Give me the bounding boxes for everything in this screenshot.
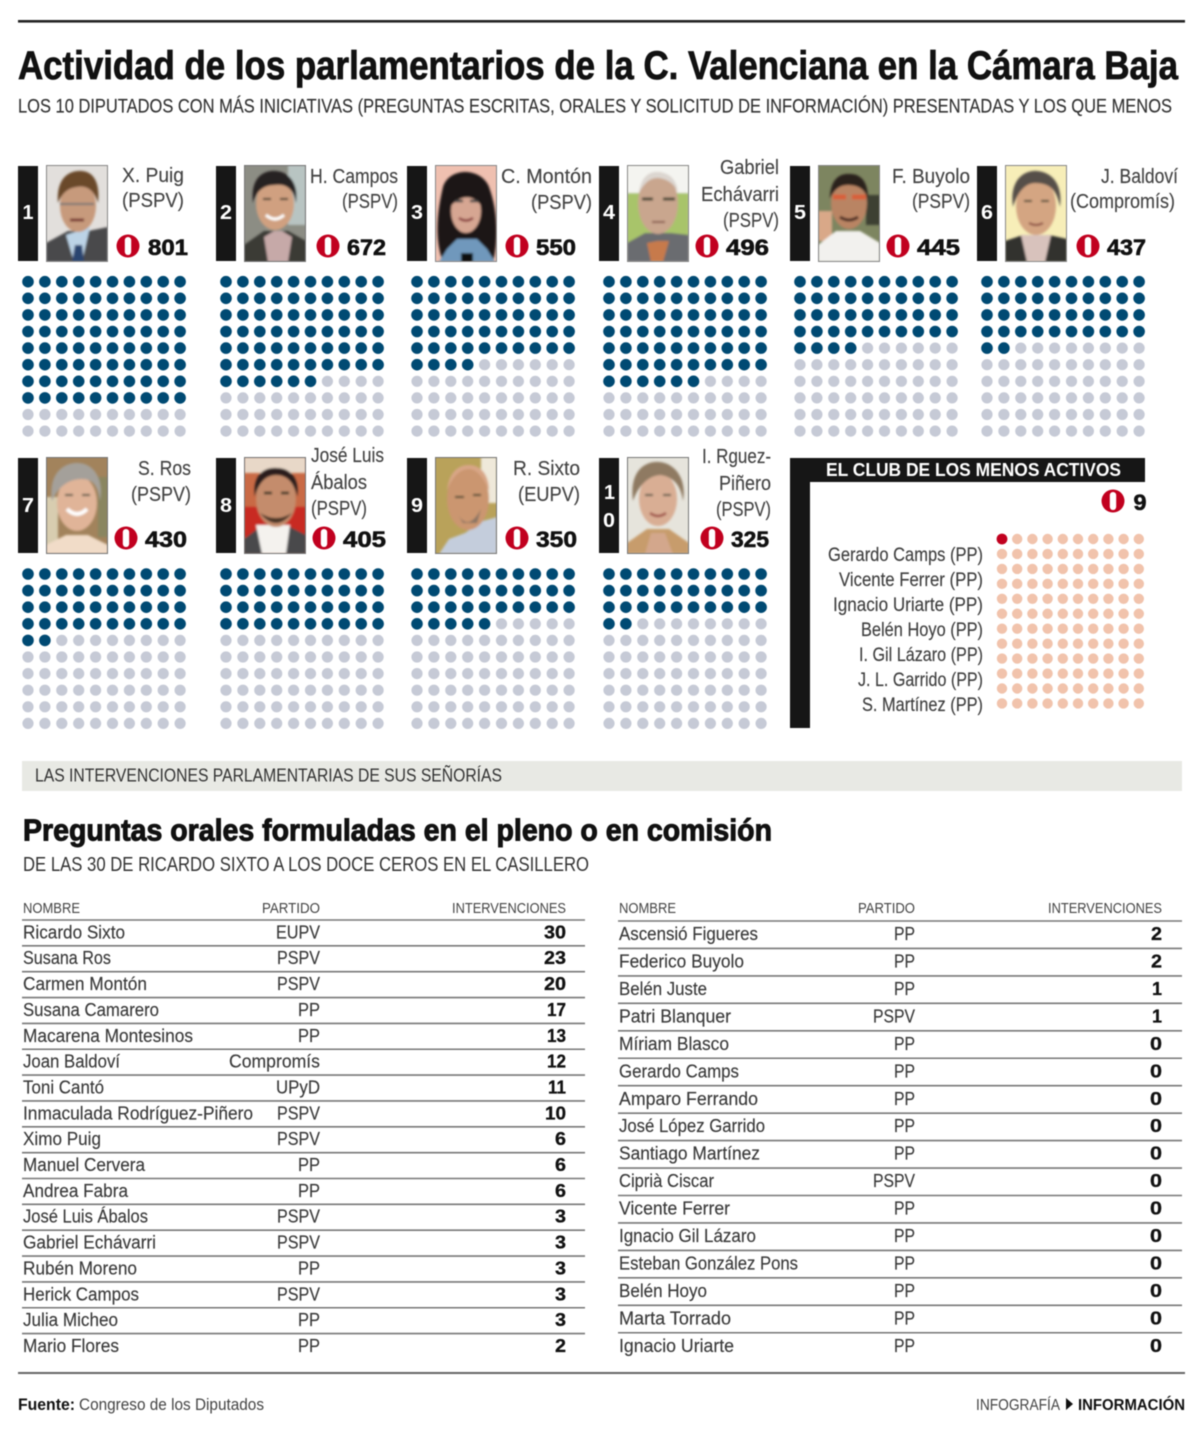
credit: INFORMACIÓN <box>1078 1395 1185 1414</box>
row: Amparo Ferrando: Amparo Ferrando <box>619 1088 758 1109</box>
row: Ciprià Ciscar: PSPV <box>873 1170 916 1191</box>
credit <box>976 1395 1185 1414</box>
value: 801 <box>148 235 188 260</box>
table header: PARTIDO <box>858 901 915 917</box>
photo: I. Rguez-Piñero <box>627 457 689 554</box>
table header <box>619 901 1162 917</box>
names list: Ignacio Uriarte (PP) <box>833 594 983 616</box>
rank 10 <box>599 458 619 553</box>
photo: S. Ros <box>46 457 108 554</box>
row: Ricardo Sixto <box>23 921 566 942</box>
section band <box>22 761 1182 791</box>
row: Amparo Ferrando <box>619 1088 1162 1109</box>
row: Mario Flores: 2 <box>555 1335 566 1356</box>
row: Carmen Montón: 20 <box>544 973 566 994</box>
row: José López Garrido: José López Garrido <box>619 1115 765 1136</box>
rank 7 <box>18 458 38 553</box>
name <box>310 166 398 213</box>
name: (PSPV) <box>342 191 398 213</box>
row: Ignacio Gil Lázaro <box>619 1225 1162 1246</box>
row: Vicente Ferrer: Vicente Ferrer <box>619 1198 730 1219</box>
value: 430 <box>145 527 187 552</box>
dot grid <box>28 574 180 723</box>
row: Ignacio Uriarte <box>619 1335 1162 1356</box>
row: Carmen Montón: PSPV <box>277 973 321 994</box>
value: 445 <box>917 235 960 260</box>
frame and heading: EL CLUB DE LOS MENOS ACTIVOS <box>826 460 1121 480</box>
row: Marta Torrado: 0 <box>1150 1307 1162 1328</box>
icon: initiatives badge <box>1076 234 1100 258</box>
icon: initiatives badge <box>700 526 724 550</box>
name: Gabriel <box>720 157 779 179</box>
row: Belén Juste: 1 <box>1152 978 1162 999</box>
row: Susana Camarero: Susana Camarero <box>23 999 159 1020</box>
subheading: DE LAS 30 DE RICARDO SIXTO A LOS DOCE CEROS EN EL CASILLERO <box>23 853 589 876</box>
name: H. Campos <box>310 166 398 188</box>
row: Andrea Fabra: 6 <box>555 1180 566 1201</box>
panel: 8 José Luis Ábalos <box>216 445 386 723</box>
rank 2 <box>216 166 236 261</box>
row: José Luis Ábalos: José Luis Ábalos <box>23 1206 148 1227</box>
photo: H. Campos <box>244 165 306 262</box>
row: Manuel Cervera <box>23 1154 566 1175</box>
table header: NOMBRE <box>23 901 80 917</box>
dot grid <box>226 574 378 723</box>
name: Ábalos <box>311 471 367 494</box>
icon: initiatives badge <box>1102 490 1124 512</box>
row: Belén Hoyo <box>619 1280 1162 1301</box>
photo: José Luis Ábalos <box>244 457 306 554</box>
dot grid <box>987 282 1140 431</box>
row: Macarena Montesinos: PP <box>298 1025 320 1046</box>
row: Rubén Moreno <box>23 1257 566 1278</box>
names list: Gerardo Camps (PP) <box>828 544 983 566</box>
section band: LAS INTERVENCIONES PARLAMENTARIAS DE SUS SEÑORÍAS <box>35 764 502 786</box>
value: 672 <box>347 235 386 260</box>
row: Esteban González Pons: 0 <box>1150 1253 1162 1274</box>
row: Marta Torrado: Marta Torrado <box>619 1307 731 1328</box>
row: Ascensió Figueres: PP <box>894 923 915 944</box>
name <box>513 458 580 506</box>
row: Manuel Cervera: PP <box>298 1154 320 1175</box>
table header: NOMBRE <box>619 901 676 917</box>
row: José Luis Ábalos: PSPV <box>277 1206 321 1227</box>
value: 437 <box>1107 235 1146 260</box>
row: Ignacio Uriarte: PP <box>894 1335 915 1356</box>
row: Ximo Puig: 6 <box>555 1128 566 1149</box>
rank 5 <box>790 166 810 261</box>
name: F. Buyolo <box>892 166 970 188</box>
row: Ximo Puig: Ximo Puig <box>23 1128 101 1149</box>
row: Manuel Cervera: 6 <box>555 1154 566 1175</box>
row: Herick Campos <box>23 1283 566 1304</box>
row: José López Garrido <box>619 1115 1162 1136</box>
row: Míriam Blasco: PP <box>894 1033 915 1054</box>
photo: J. Baldoví <box>1005 165 1067 262</box>
name: X. Puig <box>122 165 184 187</box>
row: Andrea Fabra: PP <box>298 1180 320 1201</box>
row: Susana Ros: 23 <box>544 947 566 968</box>
row: Gabriel Echávarri: Gabriel Echávarri <box>23 1232 156 1253</box>
name: (PSPV) <box>131 484 191 506</box>
rank 6: 6 <box>981 202 993 224</box>
rank 1 <box>18 166 38 261</box>
row: Belén Juste: Belén Juste <box>619 978 707 999</box>
table header <box>23 901 566 917</box>
row: Gerardo Camps: PP <box>894 1060 915 1081</box>
panel: 7 S. Ros <box>18 457 191 723</box>
dot grid <box>417 282 570 431</box>
row: Inmaculada Rodríguez-Piñero: 10 <box>545 1102 566 1123</box>
row: José López Garrido: PP <box>894 1115 915 1136</box>
row: Ricardo Sixto: EUPV <box>276 921 321 942</box>
photo: Gabriel Echávarri <box>627 165 689 262</box>
panel: el club de los menos activos <box>790 458 1146 728</box>
names list: Belén Hoyo (PP) <box>861 619 983 641</box>
row: Julia Micheo <box>23 1309 566 1330</box>
row: Susana Ros: PSPV <box>277 947 321 968</box>
name <box>1070 166 1178 213</box>
rank 8: 8 <box>220 495 232 517</box>
rank 9 <box>407 458 427 553</box>
row: Míriam Blasco: 0 <box>1150 1033 1162 1054</box>
row: Federico Buyolo: 2 <box>1151 951 1162 972</box>
row: Ciprià Ciscar: Ciprià Ciscar <box>619 1170 714 1191</box>
row: Esteban González Pons: PP <box>894 1253 915 1274</box>
name <box>892 166 970 213</box>
name: (PSPV) <box>311 498 367 520</box>
row: Gabriel Echávarri: PSPV <box>277 1232 321 1253</box>
icon: initiatives badge <box>696 234 718 258</box>
icon: initiatives badge <box>506 234 528 258</box>
name <box>501 166 592 214</box>
row: Toni Cantó: 11 <box>548 1076 566 1097</box>
row: Federico Buyolo: Federico Buyolo <box>619 951 744 972</box>
row: Ignacio Uriarte: 0 <box>1150 1335 1162 1356</box>
row: Marta Torrado: PP <box>894 1307 915 1328</box>
rank 5: 5 <box>794 202 806 224</box>
dot grid <box>417 574 570 723</box>
row: Vicente Ferrer <box>619 1198 1162 1219</box>
photo: F. Buyolo <box>818 165 880 262</box>
names list: S. Martínez (PP) <box>862 694 983 716</box>
photo: R. Sixto <box>435 457 497 554</box>
name: J. Baldoví <box>1101 166 1178 188</box>
rank 1: 1 <box>22 202 34 224</box>
name: (PSPV) <box>716 499 771 521</box>
name: (PSPV) <box>723 210 779 232</box>
row: Gerardo Camps: 0 <box>1150 1060 1162 1081</box>
row: Belén Hoyo: PP <box>894 1280 915 1301</box>
source: Congreso de los Diputados <box>79 1396 264 1414</box>
row: Toni Cantó: UPyD <box>276 1076 320 1097</box>
panel: 9 R. Sixto <box>407 457 580 723</box>
row: Belén Juste <box>619 978 1162 999</box>
row: Ricardo Sixto: 30 <box>544 921 566 942</box>
panel: 10 I. Rguez-Piñero <box>599 446 771 723</box>
photo: X. Puig <box>46 165 108 262</box>
row: Federico Buyolo: PP <box>894 951 915 972</box>
row: Julia Micheo: 3 <box>555 1309 566 1330</box>
rank 10: 0 <box>603 510 615 532</box>
value: 550 <box>536 235 576 260</box>
row: Herick Campos: 3 <box>555 1283 566 1304</box>
heading: preguntas orales: Preguntas orales formuladas en el pleno o en comisión <box>23 812 772 848</box>
row: Rubén Moreno: 3 <box>555 1257 566 1278</box>
panel: 1 X. Puig <box>18 165 188 431</box>
name: C. Montón <box>501 166 592 188</box>
row: Susana Ros: Susana Ros <box>23 947 111 968</box>
row: Ignacio Gil Lázaro: 0 <box>1150 1225 1162 1246</box>
name: (PSPV) <box>122 190 184 212</box>
row: Míriam Blasco: Míriam Blasco <box>619 1033 729 1054</box>
row: Toni Cantó: Toni Cantó <box>23 1076 104 1097</box>
row: Vicente Ferrer: PP <box>894 1198 915 1219</box>
row: Andrea Fabra: Andrea Fabra <box>23 1180 129 1201</box>
row: Mario Flores: PP <box>298 1335 320 1356</box>
row: Esteban González Pons: Esteban González Pons <box>619 1253 798 1274</box>
row: José López Garrido: 0 <box>1150 1115 1162 1136</box>
row: Herick Campos: PSPV <box>277 1283 321 1304</box>
source: Fuente: <box>18 1396 75 1414</box>
row: Carmen Montón <box>23 973 566 994</box>
table header: PARTIDO <box>262 901 320 917</box>
value: 9 <box>1134 490 1146 515</box>
credit: INFOGRAFÍA <box>976 1395 1060 1414</box>
row: Toni Cantó <box>23 1076 566 1098</box>
row: Gerardo Camps: Gerardo Camps <box>619 1060 739 1081</box>
table header: INTERVENCIONES <box>452 901 566 917</box>
row: Ignacio Uriarte: Ignacio Uriarte <box>619 1335 734 1356</box>
name <box>122 165 184 212</box>
value: 496 <box>726 235 769 260</box>
rank 9: 9 <box>411 495 423 517</box>
row: Joan Baldoví <box>23 1051 566 1072</box>
row: Patri Blanquer: Patri Blanquer <box>619 1005 731 1026</box>
row: Susana Camarero: PP <box>298 999 320 1020</box>
row: Santiago Martínez: PP <box>894 1143 915 1164</box>
row: Ximo Puig <box>23 1128 566 1149</box>
row: Joan Baldoví: Compromís <box>229 1051 320 1072</box>
row: Inmaculada Rodríguez-Piñero: PSPV <box>277 1102 321 1123</box>
row: Susana Ros <box>23 947 566 968</box>
row: Ascensió Figueres: Ascensió Figueres <box>619 923 758 944</box>
row: Macarena Montesinos: Macarena Montesinos <box>23 1025 193 1046</box>
row: Ricardo Sixto: Ricardo Sixto <box>23 921 125 942</box>
panel: 6 J. Baldoví <box>977 165 1178 431</box>
row: Esteban González Pons <box>619 1252 1162 1274</box>
name: (PSPV) <box>912 191 970 213</box>
row: Manuel Cervera: Manuel Cervera <box>23 1154 146 1175</box>
row: Ximo Puig: PSPV <box>277 1128 321 1149</box>
row: Santiago Martínez: Santiago Martínez <box>619 1143 760 1164</box>
row: Andrea Fabra <box>23 1180 566 1201</box>
names list: Vicente Ferrer (PP) <box>839 569 983 591</box>
row: Vicente Ferrer: 0 <box>1150 1198 1162 1219</box>
name: (EUPV) <box>518 484 580 506</box>
name <box>311 445 384 520</box>
row: Belén Hoyo: Belén Hoyo <box>619 1280 707 1301</box>
names list <box>828 544 983 716</box>
row: Joan Baldoví: 12 <box>547 1051 566 1072</box>
name: (PSPV) <box>531 192 592 214</box>
name: José Luis <box>311 445 384 467</box>
value: 325 <box>731 527 769 552</box>
panel: 5 F. Buyolo <box>790 165 970 431</box>
name <box>701 157 779 232</box>
row: Patri Blanquer <box>619 1005 1162 1026</box>
row: Inmaculada Rodríguez-Piñero: Inmaculada Rodríguez-Piñero <box>23 1102 253 1123</box>
row: Ignacio Gil Lázaro: PP <box>894 1225 915 1246</box>
rank 7: 7 <box>22 495 34 517</box>
icon: initiatives badge <box>316 234 340 258</box>
row: Amparo Ferrando: 0 <box>1150 1088 1162 1109</box>
name <box>702 446 771 521</box>
row: Ciprià Ciscar: 0 <box>1150 1170 1162 1191</box>
row: Julia Micheo: Julia Micheo <box>23 1309 118 1330</box>
row: Ascensió Figueres: 2 <box>1151 923 1162 944</box>
row: Susana Camarero <box>23 999 566 1020</box>
rank 3: 3 <box>411 202 423 224</box>
rank 4: 4 <box>603 202 616 224</box>
row: Susana Camarero: 17 <box>547 999 566 1020</box>
row: Belén Hoyo: 0 <box>1150 1280 1162 1301</box>
row: Julia Micheo: PP <box>298 1309 320 1330</box>
name: S. Ros <box>138 458 191 480</box>
row: Ciprià Ciscar <box>619 1170 1162 1191</box>
row: Míriam Blasco <box>619 1033 1162 1054</box>
row: Rubén Moreno: PP <box>298 1257 320 1278</box>
row: Rubén Moreno: Rubén Moreno <box>23 1257 137 1278</box>
row: Gabriel Echávarri <box>23 1232 566 1253</box>
rank 6 <box>977 166 997 261</box>
rank 4 <box>599 166 619 261</box>
rank 3 <box>407 166 427 261</box>
row: Carmen Montón: Carmen Montón <box>23 973 147 994</box>
panel: 2 H. Campos <box>216 165 398 431</box>
rank 10: 1 <box>604 482 615 504</box>
name: I. Rguez- <box>702 446 771 468</box>
row: Federico Buyolo <box>619 951 1162 972</box>
row: Amparo Ferrando: PP <box>894 1088 915 1109</box>
icon: initiatives badge <box>114 526 138 550</box>
icon: initiatives badge <box>506 526 528 550</box>
panel: 3 C. Montón <box>407 165 592 431</box>
row: Santiago Martínez <box>619 1143 1162 1164</box>
row: Macarena Montesinos <box>23 1025 566 1046</box>
name: R. Sixto <box>513 458 580 480</box>
row: Gerardo Camps <box>619 1060 1162 1081</box>
row: Mario Flores: Mario Flores <box>23 1335 119 1356</box>
row: José Luis Ábalos: 3 <box>555 1206 566 1227</box>
rank 2: 2 <box>220 202 232 224</box>
row: Belén Juste: PP <box>894 978 915 999</box>
name: Piñero <box>719 473 771 495</box>
frame and heading <box>790 458 1145 728</box>
photo: C. Montón <box>435 165 497 262</box>
icon: initiatives badge <box>886 234 910 258</box>
row: Marta Torrado <box>619 1307 1162 1328</box>
panel: 4 Gabriel Echávarri <box>599 157 779 431</box>
names list: J. L. Garrido (PP) <box>858 669 983 691</box>
table header: INTERVENCIONES <box>1048 901 1162 917</box>
row: Santiago Martínez: 0 <box>1150 1143 1162 1164</box>
row: Mario Flores <box>23 1335 566 1356</box>
row: Gabriel Echávarri: 3 <box>555 1232 566 1253</box>
row: Joan Baldoví: Joan Baldoví <box>23 1051 121 1072</box>
row: Patri Blanquer: PSPV <box>873 1005 916 1026</box>
dot grid <box>28 282 180 431</box>
dot grid <box>609 282 762 431</box>
row: Patri Blanquer: 1 <box>1152 1005 1162 1026</box>
icon: initiatives badge <box>116 234 140 258</box>
name: Echávarri <box>701 184 779 206</box>
value: 350 <box>536 527 577 552</box>
row: Herick Campos: Herick Campos <box>23 1283 139 1304</box>
row: Macarena Montesinos: 13 <box>547 1025 566 1046</box>
row: José Luis Ábalos <box>23 1206 566 1227</box>
row: Ignacio Gil Lázaro: Ignacio Gil Lázaro <box>619 1225 756 1246</box>
dot grid <box>800 282 952 431</box>
names list: I. Gil Lázaro (PP) <box>859 644 983 666</box>
dot grid <box>226 282 378 431</box>
icon: initiatives badge <box>312 526 336 550</box>
dot grid <box>609 574 762 723</box>
name: (Compromís) <box>1070 191 1175 213</box>
value: 405 <box>343 527 386 552</box>
rank 8 <box>216 458 236 553</box>
table: left <box>23 901 566 1356</box>
table: right <box>619 901 1162 1356</box>
name <box>131 458 191 506</box>
row: Ascensió Figueres <box>619 923 1162 944</box>
dot grid <box>997 534 1139 703</box>
row: Inmaculada Rodríguez-Piñero <box>23 1102 566 1123</box>
